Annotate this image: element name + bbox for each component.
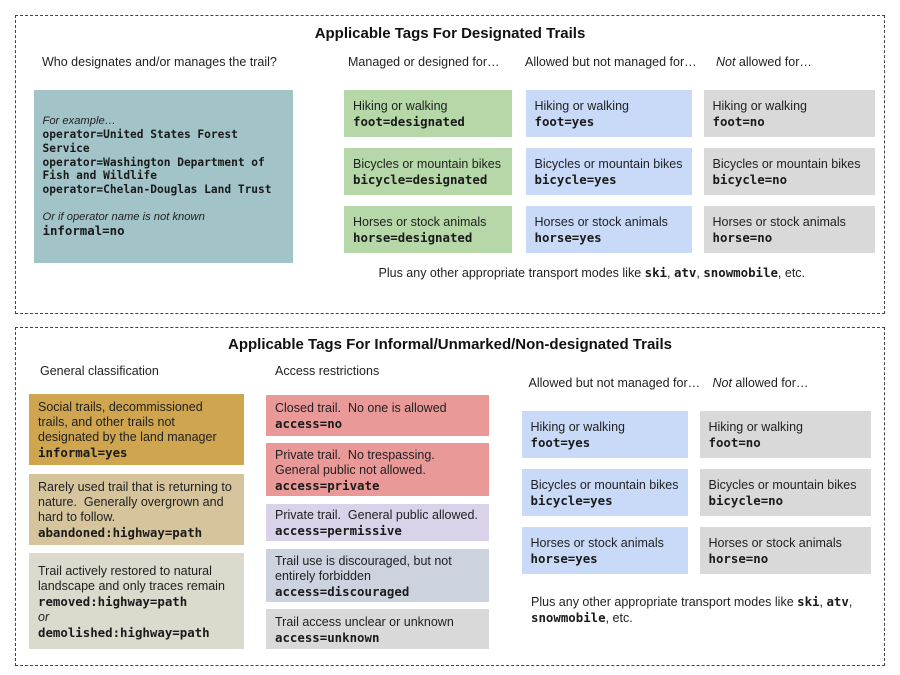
tag box: horse designated <box>344 206 512 253</box>
box: removed or demolished: landscape and only traces remain <box>38 579 225 593</box>
tag box: foot no: Hiking or walking <box>712 98 807 112</box>
tag box: foot yes: foot=yes <box>534 114 594 128</box>
box: access no: access=no <box>275 416 342 430</box>
tag box: horse designated: horse=designated <box>353 230 472 244</box>
box: removed or demolished: Trail actively restored to natural <box>38 564 212 578</box>
box: access private: access=private <box>275 478 379 492</box>
panel: operator examples: operator=Washington Department of <box>42 156 265 169</box>
box: removed or demolished: removed:highway=path <box>38 594 187 609</box>
heading: not allowed: Not allowed for… <box>712 376 808 390</box>
box: access private <box>266 443 489 496</box>
heading: allowed but not managed: Allowed but not managed for… <box>528 376 700 390</box>
box: access discouraged: access=discouraged <box>275 584 409 598</box>
box: access permissive: access=permissive <box>275 522 402 538</box>
tag box: horse no: horse=no <box>708 550 768 566</box>
box: removed or demolished: demolished:highway=path <box>38 625 210 640</box>
panel: operator examples: Fish and Wildlife <box>42 169 157 182</box>
tag box: bicycle designated: Bicycles or mountain bikes <box>353 156 501 170</box>
box: access discouraged <box>266 549 489 602</box>
tag box: bicycle yes: bicycle=yes <box>534 172 617 186</box>
heading: not allowed: Not allowed for… <box>716 54 812 68</box>
tag box: foot yes: foot=yes <box>530 434 590 450</box>
panel: operator examples: For example… <box>42 115 116 127</box>
tag box: horse designated: Horses or stock animals <box>353 214 486 228</box>
note: other transport modes: Plus any other appropriate transport modes like ski, atv, <box>531 594 852 608</box>
tag box: horse yes: Horses or stock animals <box>530 536 664 550</box>
tag box: horse no <box>704 206 875 253</box>
panel: operator examples <box>34 90 293 263</box>
tag box: horse no <box>700 527 871 574</box>
tag box: bicycle yes: Bicycles or mountain bikes <box>530 478 678 492</box>
box: access permissive: Private trail. General public allowed. <box>275 508 478 522</box>
tag box: foot no: Hiking or walking <box>708 420 803 434</box>
box: abandoned: hard to follow. <box>38 510 115 524</box>
tag box: bicycle no: bicycle=no <box>708 492 783 508</box>
box: abandoned: Rarely used trail that is returning to <box>38 480 232 494</box>
heading: access restrictions: Access restrictions <box>275 364 379 378</box>
tag box: bicycle yes <box>522 469 688 516</box>
tag box: horse yes: Horses or stock animals <box>534 214 668 228</box>
panel: operator examples: operator=United States Forest <box>42 128 238 141</box>
tag box: bicycle designated: bicycle=designated <box>353 172 487 186</box>
box: access unknown: access=unknown <box>275 630 379 644</box>
tag box: foot designated: Hiking or walking <box>353 98 447 112</box>
heading: managed or designed: Managed or designed for… <box>348 54 499 68</box>
note: other transport modes: Plus any other appropriate transport modes like ski, atv, snowmobile, etc. <box>378 265 805 280</box>
tag box: horse no: horse=no <box>712 230 772 244</box>
tag box: bicycle yes: Bicycles or mountain bikes <box>534 156 682 170</box>
tag box: horse yes: horse=yes <box>534 230 602 244</box>
panel: operator examples: informal=no <box>42 223 125 238</box>
tag box: foot yes: Hiking or walking <box>530 420 625 434</box>
tag box: foot no <box>704 90 875 137</box>
tag box: foot designated: foot=designated <box>353 114 465 128</box>
panel: designated trails <box>15 15 885 314</box>
panel: operator examples: operator=Chelan-Douglas Land Trust <box>42 183 272 196</box>
box: removed or demolished: or <box>38 610 49 624</box>
panel: informal trails <box>15 327 885 666</box>
tag box: horse yes <box>526 206 692 253</box>
box: access unknown <box>266 609 489 649</box>
tag box: bicycle no: Bicycles or mountain bikes <box>708 478 856 492</box>
heading: who designates: Who designates and/or manages the trail? <box>42 54 277 68</box>
box: informal yes: Social trails, decommissioned <box>38 400 203 414</box>
tag box: foot yes: Hiking or walking <box>534 98 629 112</box>
tag box: foot designated <box>344 90 512 137</box>
box: access private: Private trail. No trespassing. <box>275 448 435 462</box>
tag box: horse yes: horse=yes <box>530 550 598 566</box>
tag box: bicycle no <box>700 469 871 516</box>
tag box: bicycle no: Bicycles or mountain bikes <box>712 156 860 170</box>
tag box: foot yes <box>522 411 688 458</box>
tag box: bicycle no: bicycle=no <box>712 172 787 186</box>
box: abandoned: abandoned:highway=path <box>38 524 202 540</box>
box: access no <box>266 395 489 436</box>
tag box: bicycle no <box>704 148 875 195</box>
panel: operator examples: Or if operator name is not known <box>42 211 205 223</box>
box: access unknown: Trail access unclear or unknown <box>275 614 454 628</box>
tag box: foot yes <box>526 90 692 137</box>
box: informal yes: designated by the land manager <box>38 430 217 444</box>
tag box: foot no <box>700 411 871 458</box>
box: access discouraged: entirely forbidden <box>275 568 371 582</box>
note: other transport modes <box>531 594 852 624</box>
tag box: horse no: Horses or stock animals <box>712 214 846 228</box>
heading: general classification: General classification <box>40 364 159 378</box>
box: abandoned <box>29 474 244 545</box>
title: designated trails: Applicable Tags For Designated Trails <box>315 24 585 42</box>
tag box: foot no: foot=no <box>708 434 761 450</box>
title: informal trails: Applicable Tags For Informal/Unmarked/Non-designated Trails <box>228 336 672 352</box>
tag box: horse yes <box>522 527 688 574</box>
tag box: horse no: Horses or stock animals <box>708 536 842 550</box>
box: informal yes <box>29 394 244 465</box>
box: informal yes: informal=yes <box>38 444 128 460</box>
heading: allowed but not managed: Allowed but not managed for… <box>525 54 697 68</box>
tag box: foot no: foot=no <box>712 114 765 128</box>
box: access permissive <box>266 504 489 541</box>
box: removed or demolished <box>29 553 244 649</box>
box: informal yes: trails, and other trails not <box>38 414 175 428</box>
tag box: bicycle designated <box>344 148 512 195</box>
tag box: bicycle yes <box>526 148 692 195</box>
box: abandoned: nature. Generally overgrown and <box>38 494 224 508</box>
note: other transport modes: snowmobile, etc. <box>531 610 633 624</box>
panel: operator examples: Service <box>42 142 90 155</box>
box: access private: General public not allowed. <box>275 462 426 476</box>
box: access no: Closed trail. No one is allowed <box>275 400 447 414</box>
box: access discouraged: Trail use is discouraged, but not <box>275 554 452 568</box>
tag box: bicycle yes: bicycle=yes <box>530 492 613 508</box>
